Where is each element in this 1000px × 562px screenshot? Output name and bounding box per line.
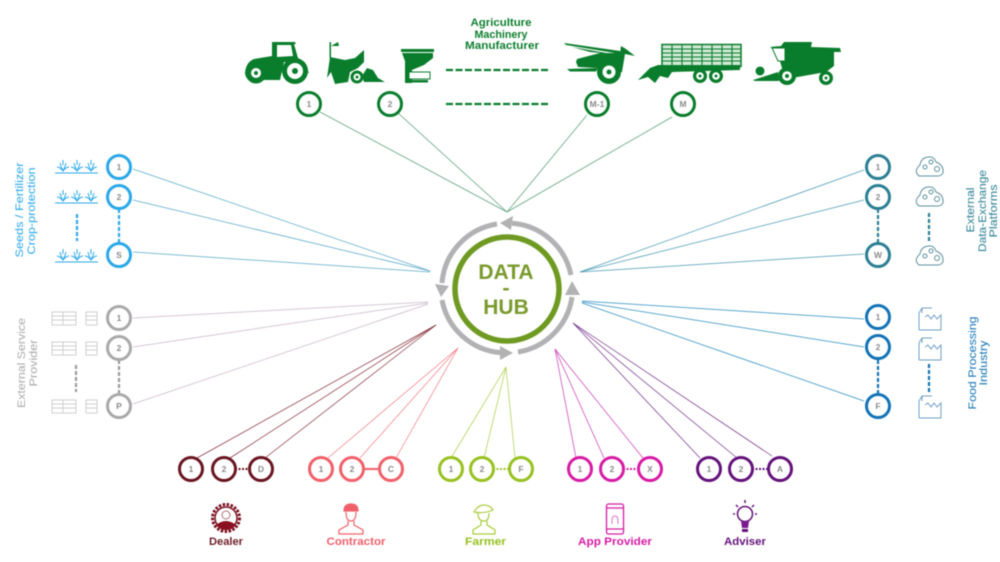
heading: machinery manufacturer: Manufacturer <box>465 40 540 52</box>
dashed connectors <box>878 209 929 243</box>
label: seeds fertilizer: Crop-protection <box>26 168 38 254</box>
panel: dealer <box>180 325 436 548</box>
hub text <box>478 261 534 319</box>
label: external service provider: External Service <box>16 318 28 408</box>
dashed connectors <box>446 70 550 104</box>
icon: seeder <box>327 42 385 84</box>
nodes: machinery: 1 <box>307 99 312 109</box>
nodes: seeds: 1 <box>117 162 122 172</box>
icon: spreader <box>401 49 434 83</box>
panel: app provider <box>555 349 662 548</box>
nodes: contractor <box>310 458 402 480</box>
nodes: data exchange <box>866 156 890 266</box>
panel: food processing industry <box>582 301 990 418</box>
nodes: service: 2 <box>117 343 122 353</box>
icon: light bulb <box>733 500 757 532</box>
heading: machinery manufacturer: Machinery <box>474 29 528 41</box>
panel: external service provider <box>16 302 428 418</box>
icon: tractor <box>245 42 309 84</box>
dashed connectors <box>76 360 119 394</box>
nodes: machinery: M-1 <box>590 99 605 109</box>
nodes: adviser: A <box>777 464 783 474</box>
nodes: seeds: 2 <box>117 192 122 202</box>
heading: machinery manufacturer: Agriculture <box>470 17 532 29</box>
connection lines: app provider <box>555 349 643 458</box>
icon: dealer gear <box>212 504 240 532</box>
nodes: farmer <box>440 458 532 480</box>
hub text: - <box>502 277 510 300</box>
nodes: contractor: 2 <box>350 464 355 474</box>
connection lines: contractor <box>328 348 458 458</box>
nodes: food <box>866 306 890 418</box>
nodes: data exchange: W <box>874 250 883 260</box>
label: seeds fertilizer <box>14 162 38 258</box>
label: data-exchange platforms: Platforms <box>988 184 1000 238</box>
nodes: service: P <box>116 401 122 411</box>
icons: crops <box>55 160 98 262</box>
panel: adviser <box>573 323 792 548</box>
nodes: app provider: 2 <box>610 464 615 474</box>
panel: contractor <box>310 348 458 548</box>
label: farmer: Farmer <box>465 536 507 548</box>
label: data-exchange platforms: Data-Exchange <box>977 170 989 252</box>
icon: loader wagon <box>638 44 741 83</box>
label: data-exchange platforms <box>965 170 1000 252</box>
nodes: machinery <box>298 92 694 116</box>
label: data-exchange platforms: External <box>965 188 977 232</box>
icons: clouds <box>916 157 943 265</box>
label: seeds fertilizer: Seeds / Fertilizer <box>14 162 26 258</box>
connection lines: farmer <box>451 367 515 458</box>
nodes: adviser: 2 <box>739 464 744 474</box>
connection lines: data exchange <box>580 170 864 272</box>
heading: machinery manufacturer <box>465 17 540 52</box>
nodes: farmer: 1 <box>449 464 454 474</box>
nodes: data exchange: 1 <box>876 162 881 172</box>
connection lines: dealer <box>197 325 436 458</box>
label: dealer: Dealer <box>209 536 244 548</box>
nodes: dealer: 1 <box>189 464 194 474</box>
nodes: service <box>108 306 130 418</box>
nodes: food: 1 <box>876 312 881 322</box>
hub text: DATA <box>478 261 534 284</box>
icon: combine harvester <box>753 42 841 85</box>
connection lines: machinery <box>320 112 672 212</box>
icon: baler <box>564 43 635 84</box>
connection lines: seeds <box>133 169 430 272</box>
nodes: contractor: 1 <box>319 464 324 474</box>
panel: agriculture machinery manufacturer <box>245 17 841 212</box>
panel: external data-exchange platforms <box>580 156 1000 272</box>
icon: smartphone <box>606 504 624 534</box>
nodes: dealer: 2 <box>222 464 227 474</box>
nodes: seeds <box>108 156 130 266</box>
nodes: seeds: S <box>116 250 122 260</box>
label: food processing industry <box>967 316 990 410</box>
nodes: adviser <box>698 458 792 480</box>
nodes: dealer <box>180 458 272 480</box>
connection lines: adviser <box>573 323 772 458</box>
nodes: service: 1 <box>117 313 122 323</box>
dashed connectors <box>77 209 119 243</box>
nodes: contractor: C <box>388 464 394 474</box>
nodes: machinery: M <box>679 99 687 109</box>
green hub ring <box>455 237 559 341</box>
connection lines: food <box>582 301 864 401</box>
circular arrows <box>435 216 580 360</box>
icons: service documents <box>52 312 97 413</box>
nodes: adviser: 1 <box>707 464 712 474</box>
label: external service provider: Provider <box>28 339 40 386</box>
nodes: machinery: 2 <box>388 99 393 109</box>
nodes: app provider: 1 <box>578 464 583 474</box>
icons: factories <box>919 308 941 418</box>
panel: data hub <box>435 216 580 360</box>
panel: farmer <box>440 367 532 548</box>
nodes: food: 2 <box>876 342 881 352</box>
dashed connectors <box>878 360 929 394</box>
hub text: HUB <box>483 296 529 319</box>
nodes: app provider <box>568 458 662 480</box>
nodes: food: F <box>875 401 881 411</box>
icon: contractor <box>339 504 363 534</box>
label: app provider: App Provider <box>578 536 653 548</box>
connection lines: service <box>133 302 428 404</box>
label: external service provider <box>16 318 40 408</box>
nodes: app provider: X <box>647 464 653 474</box>
nodes: farmer: 2 <box>480 464 485 474</box>
nodes: dealer: D <box>258 464 264 474</box>
label: food processing industry: Food Processing <box>967 316 979 410</box>
panel: seeds fertilizer crop-protection <box>14 156 430 272</box>
nodes: data exchange: 2 <box>876 192 881 202</box>
icon: farmer <box>473 505 495 534</box>
label: food processing industry: Industry <box>978 340 990 386</box>
label: adviser: Adviser <box>724 536 767 548</box>
label: contractor: Contractor <box>326 536 386 548</box>
nodes: farmer: F <box>518 464 524 474</box>
